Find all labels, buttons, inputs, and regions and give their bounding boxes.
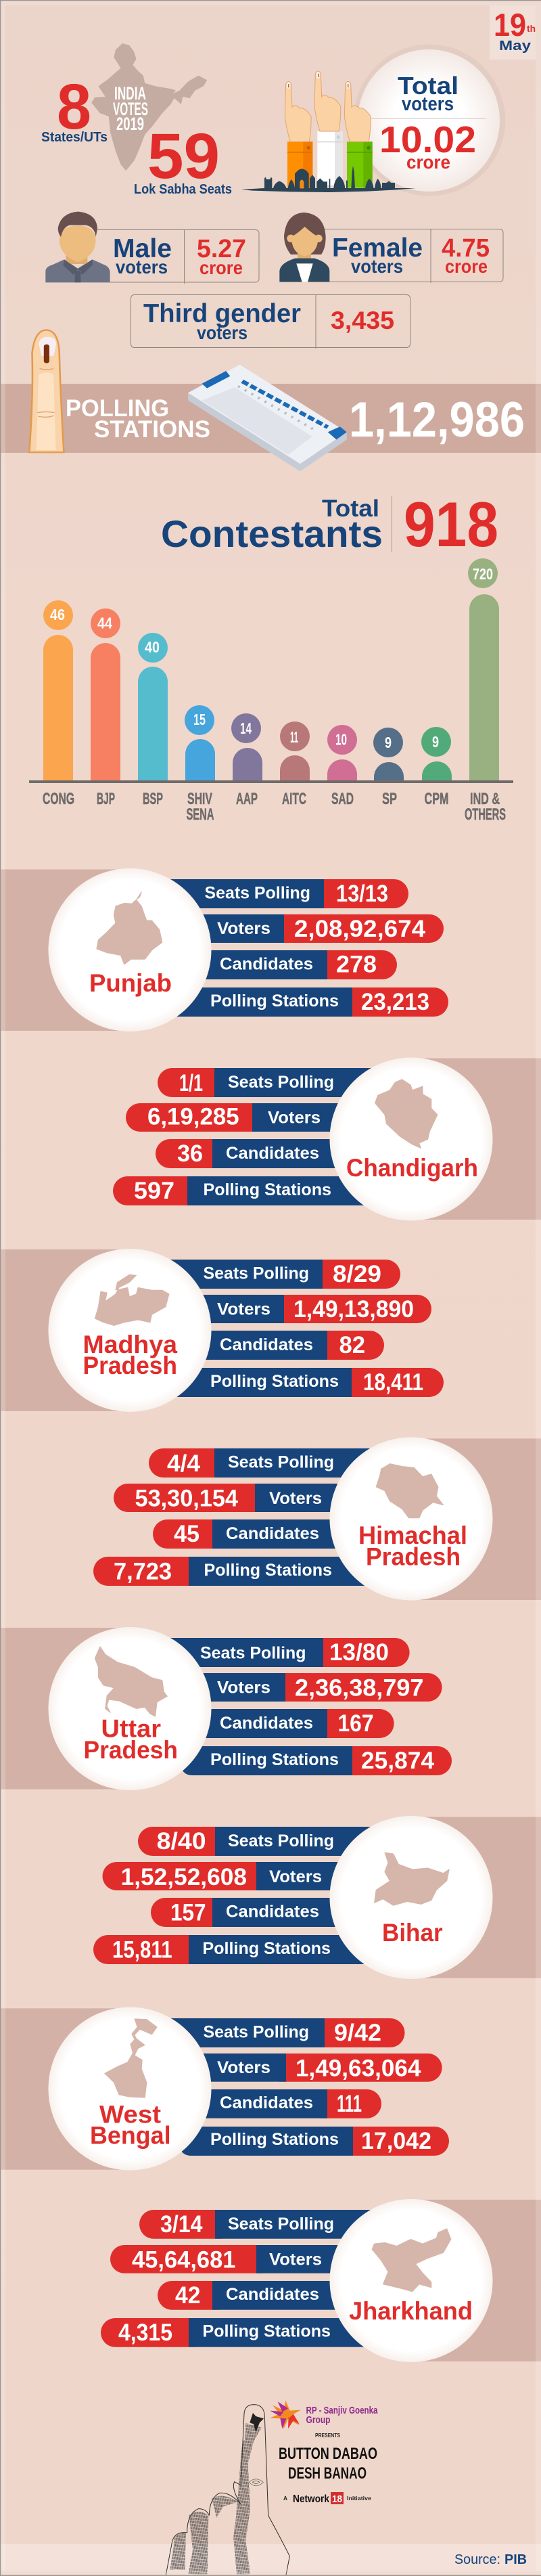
bar: BJP 44 [91, 608, 120, 808]
panel: Madhya Pradesh: Pradesh [83, 1352, 177, 1379]
bar: CPM 9: CPM [425, 790, 449, 808]
panel: polling stations band [1, 384, 541, 453]
panel: West Bengal: Candidates [220, 2093, 313, 2112]
panel: Uttar Pradesh: Polling Stations [210, 1750, 339, 1769]
panel: Madhya Pradesh: Voters [217, 1300, 270, 1318]
panel: Jharkhand: 3/14 [160, 2211, 203, 2238]
panel: Himachal Pradesh: Pradesh [366, 1543, 461, 1570]
icon: inked finger [29, 330, 64, 452]
panel: Uttar Pradesh: Seats Polling [200, 1644, 306, 1663]
panel: Punjab: Punjab [89, 969, 172, 997]
map: Punjab [97, 892, 162, 964]
panel: male voters [97, 230, 259, 284]
panel: Chandigarh: Voters [268, 1109, 321, 1128]
panel: Bihar: Bihar [382, 1919, 443, 1947]
stat: 8 states: 8 [57, 71, 91, 143]
bar: SP 9 [373, 728, 404, 808]
map: Jharkhand [372, 2229, 451, 2292]
panel: Jharkhand: 45,64,681 [132, 2247, 235, 2273]
panel: West Bengal: 111 [337, 2091, 362, 2117]
panel: West Bengal: West [99, 2101, 161, 2129]
panel: Madhya Pradesh: 82 [339, 1332, 365, 1358]
panel: Jharkhand: Polling Stations [203, 2322, 331, 2341]
bar: BSP 40: BSP [143, 790, 163, 808]
panel: Chandigarh: 36 [177, 1140, 203, 1167]
total voters circle: 10.02 [379, 118, 476, 160]
panel: Chandigarh: 6,19,285 [147, 1103, 239, 1130]
panel: Himachal Pradesh: Candidates [226, 1524, 319, 1543]
map title: India Votes 2019 [113, 83, 148, 134]
panel: Punjab: Seats Polling [204, 883, 310, 902]
panel: female voters [325, 229, 503, 283]
bar: BSP 40 [138, 633, 168, 808]
panel: Punjab: Polling Stations [210, 992, 339, 1011]
panel: Jharkhand: Jharkhand [349, 2297, 473, 2325]
panel: third gender voters [131, 295, 410, 349]
bar: AITC 11: AITC [282, 790, 306, 808]
source band [1, 2544, 541, 2571]
bar: SP 9: SP [382, 790, 397, 808]
panel: West Bengal: Polling Stations [210, 2130, 339, 2149]
panel: Himachal Pradesh: Himachal [358, 1522, 467, 1549]
panel: Punjab: Candidates [220, 955, 313, 974]
logo: A Network18 initiative: A [283, 2495, 287, 2502]
total voters circle: Total [398, 72, 458, 99]
bar: CONG 46 [43, 600, 74, 808]
panel: West Bengal: Bengal [90, 2122, 171, 2150]
bar: Independents and others 720: OTHERS [465, 805, 506, 824]
panel: Uttar Pradesh: 13/80 [329, 1639, 389, 1666]
panel: Himachal Pradesh [93, 1438, 541, 1600]
bar: BJP 44: 44 [97, 615, 112, 632]
panel: female voters: crore [445, 256, 488, 277]
heading: total contestants: 918 [404, 489, 498, 560]
panel: Jharkhand: Seats Polling [228, 2215, 334, 2234]
panel: female voters: voters [351, 256, 403, 277]
panel: Uttar Pradesh: 25,874 [361, 1748, 435, 1774]
source credit: PIB [504, 2552, 527, 2567]
panel: Himachal Pradesh: Polling Stations [204, 1561, 332, 1580]
bar: Shiv Sena 15: 15 [193, 711, 206, 728]
date badge [490, 5, 536, 60]
panel: Himachal Pradesh: 7,723 [114, 1559, 172, 1585]
map: Madhya Pradesh [95, 1274, 169, 1326]
map: West Bengal [105, 2019, 157, 2097]
map: Chandigarh [375, 1080, 438, 1149]
panel: Chandigarh: Chandigarh [346, 1154, 478, 1182]
stat: 59 seats [134, 120, 232, 197]
bar: SP 9: 9 [385, 734, 392, 751]
total voters circle: voters [402, 93, 454, 115]
stat: 1,12,986 polling stations: 1,12,986 [349, 393, 525, 447]
bar: Shiv Sena 15 [185, 705, 215, 824]
logo: A Network18 initiative: Network [293, 2493, 329, 2505]
panel: Uttar Pradesh: Candidates [220, 1714, 313, 1733]
panel: Chandigarh: 1/1 [179, 1070, 203, 1096]
panel: Jharkhand: Voters [269, 2250, 322, 2269]
bar: CONG 46: 46 [50, 606, 65, 623]
panel: Uttar Pradesh: 167 [338, 1710, 373, 1737]
panel: Madhya Pradesh: Candidates [220, 1335, 313, 1354]
stat: 59 seats: Lok Sabha Seats [134, 182, 232, 197]
bar: SAD 10: SAD [331, 790, 354, 808]
map title: India Votes 2019: VOTES [113, 99, 148, 119]
bar: Shiv Sena 15: SENA [187, 805, 214, 824]
bar: CONG 46: CONG [43, 790, 74, 808]
source credit: Source: [454, 2552, 500, 2567]
panel: Punjab: 278 [336, 952, 377, 977]
panel: Bihar: Voters [269, 1867, 322, 1886]
label: polling stations [66, 395, 210, 443]
icon: male voter [45, 212, 110, 282]
total voters circle: crore [406, 152, 450, 173]
panel: third gender voters: voters [197, 322, 248, 343]
panel: West Bengal: 17,042 [361, 2128, 431, 2154]
panel: Chandigarh: Seats Polling [228, 1073, 334, 1092]
panel: Jharkhand: 4,315 [118, 2319, 172, 2346]
icon: female voter [279, 213, 329, 282]
panel: male voters: voters [116, 257, 168, 277]
panel: Uttar Pradesh: 2,36,38,797 [295, 1674, 423, 1701]
logo: A Network18 initiative: 18 [332, 2493, 342, 2505]
presents text: PRESENTS [315, 2433, 341, 2439]
total voters circle [354, 45, 505, 196]
panel: Punjab: 13/13 [336, 881, 388, 907]
panel: Bihar: Polling Stations [203, 1939, 331, 1958]
panel: Bihar [93, 1816, 541, 1979]
slogan: Button Dabao Desh Banao: BUTTON DABAO [279, 2445, 377, 2463]
date badge: 19 [494, 7, 526, 43]
panel: Jharkhand: Candidates [226, 2285, 319, 2304]
icon: three inked hands with skyline [241, 71, 416, 192]
logo: A Network18 initiative [283, 2492, 371, 2505]
bar: BJP 44: BJP [97, 790, 115, 808]
map: Himachal Pradesh [376, 1464, 444, 1518]
panel: Bihar: Candidates [226, 1903, 319, 1922]
source credit [454, 2552, 527, 2567]
panel: Punjab [1, 868, 448, 1031]
bar: Independents and others 720: IND & [470, 790, 500, 808]
panel: male voters: crore [199, 257, 243, 278]
bar: Shiv Sena 15: SHIV [187, 790, 212, 808]
panel: Uttar Pradesh: Voters [217, 1679, 270, 1697]
heading: total contestants: Contestants [161, 512, 383, 555]
bar: AITC 11 [280, 721, 310, 808]
panel: third gender voters: 3,435 [331, 307, 394, 334]
panel: Himachal Pradesh: 53,30,154 [135, 1486, 239, 1512]
panel: Madhya Pradesh [1, 1249, 444, 1412]
panel: Uttar Pradesh: Uttar [101, 1715, 161, 1743]
panel: male voters: 5.27 [197, 235, 246, 263]
panel: Madhya Pradesh: 8/29 [333, 1261, 381, 1287]
logo: RP-Sanjiv Goenka Group [270, 2401, 378, 2428]
panel: Chandigarh [113, 1057, 541, 1221]
panel: Punjab: Voters [217, 919, 270, 938]
panel: Bihar: Seats Polling [228, 1831, 334, 1850]
panel: West Bengal: Seats Polling [203, 2023, 309, 2042]
icon: sketched hand with inked finger [166, 2405, 289, 2576]
slogan: Button Dabao Desh Banao: DESH BANAO [288, 2464, 367, 2483]
icon: electronic voting machine [188, 365, 347, 471]
panel: West Bengal: Voters [217, 2058, 270, 2077]
bar chart: contestants by party [29, 558, 513, 824]
panel: female voters: Female [332, 234, 423, 263]
panel: West Bengal: 1,49,63,064 [296, 2056, 421, 2082]
panel: female voters: 4.75 [442, 234, 490, 263]
panel: Himachal Pradesh: 4/4 [167, 1450, 201, 1477]
panel: Bihar: 157 [170, 1900, 206, 1926]
heading: total contestants: Total [322, 495, 379, 522]
panel: Uttar Pradesh [1, 1627, 452, 1790]
heading: total contestants [161, 489, 498, 560]
stat: 8 states: States/UTs [41, 130, 108, 145]
panel: Chandigarh: 597 [134, 1178, 174, 1204]
date badge: May [499, 39, 532, 53]
panel: Bihar: 1,52,52,608 [121, 1864, 247, 1890]
panel: Madhya Pradesh: Polling Stations [210, 1372, 339, 1391]
logo: A Network18 initiative: Initiative [347, 2495, 371, 2502]
bar: SAD 10: 10 [335, 731, 347, 749]
panel: Uttar Pradesh: Pradesh [84, 1736, 178, 1764]
label: polling stations: STATIONS [94, 416, 210, 443]
map title: India Votes 2019: 2019 [116, 114, 144, 134]
bar: AITC 11: 11 [290, 728, 298, 746]
map title: India Votes 2019: INDIA [114, 83, 146, 104]
panel: Himachal Pradesh: Seats Polling [228, 1453, 334, 1472]
logo: RP-Sanjiv Goenka Group: RP - Sanjiv Goenka [306, 2405, 378, 2416]
panel: male voters: Male [113, 234, 172, 263]
panel: Madhya Pradesh: Seats Polling [203, 1264, 309, 1283]
panel: West Bengal: 9/42 [334, 2020, 381, 2046]
panel: Punjab: 2,08,92,674 [294, 916, 426, 942]
stat: 8 states [41, 71, 108, 145]
panel: Bihar: 8/40 [157, 1828, 206, 1855]
bar: Independents and others 720 [465, 558, 506, 824]
map: Bihar [375, 1852, 449, 1905]
bar: CPM 9: 9 [432, 733, 439, 751]
bar: CPM 9 [421, 727, 452, 808]
panel: Madhya Pradesh: Madhya [83, 1331, 177, 1358]
date badge: th [527, 23, 536, 34]
bar: AAP 14 [231, 713, 262, 808]
panel: Chandigarh: Candidates [226, 1144, 319, 1163]
panel: Madhya Pradesh: 1,49,13,890 [293, 1296, 414, 1323]
bar: BSP 40: 40 [145, 638, 160, 656]
icon: India map [91, 43, 207, 171]
panel: third gender voters: Third gender [143, 299, 301, 328]
stat: 59 seats: 59 [147, 120, 220, 192]
panel: Chandigarh: Polling Stations [203, 1180, 331, 1199]
panel: Himachal Pradesh: 45 [174, 1521, 199, 1547]
panel: Himachal Pradesh: Voters [269, 1489, 322, 1508]
panel: Bihar: 15,811 [112, 1937, 172, 1963]
bar: AAP 14: 14 [240, 719, 252, 737]
bar: Independents and others 720: 720 [473, 565, 493, 583]
panel: Jharkhand: 42 [175, 2282, 200, 2309]
panel: Madhya Pradesh: 18,411 [363, 1369, 423, 1396]
logo: RP-Sanjiv Goenka Group: Group [306, 2414, 330, 2426]
map: Uttar Pradesh [95, 1647, 167, 1716]
bar: AAP 14: AAP [236, 790, 258, 808]
bar: SAD 10 [327, 725, 357, 808]
slogan: Button Dabao Desh Banao [279, 2445, 377, 2483]
panel: West Bengal [1, 2007, 449, 2170]
label: polling stations: POLLING [66, 395, 169, 422]
panel: Jharkhand [101, 2199, 541, 2362]
panel: Punjab: 23,213 [361, 989, 429, 1015]
